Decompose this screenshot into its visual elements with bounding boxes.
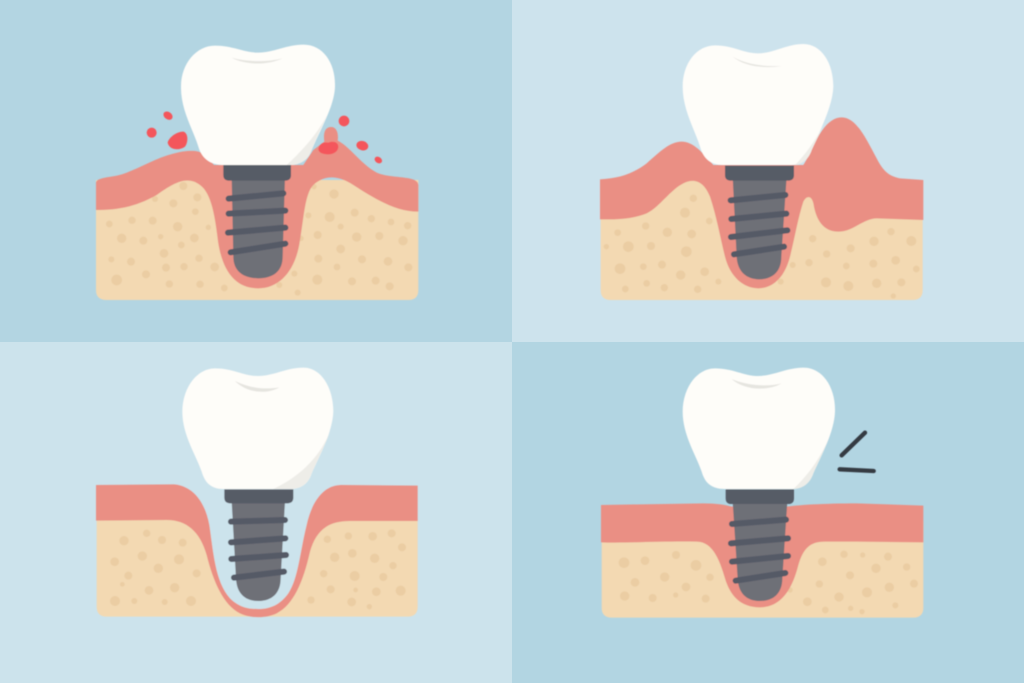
implant post [232,502,285,601]
panel: implant with flat gum and motion marks [601,368,923,618]
crown body [182,368,333,489]
panel: top left background [0,0,512,342]
crown body [683,368,835,489]
crown groove [232,58,282,64]
bone pores [619,551,918,614]
crown groove [733,57,782,67]
bone [97,518,418,617]
upper mark [842,433,865,455]
exposed socket [175,482,340,609]
crown body [683,44,833,165]
crown groove [732,379,782,389]
implant collar [224,489,293,503]
implant collar [726,489,794,504]
implant collar [725,166,794,181]
blood drops [147,110,383,165]
implant [224,489,293,601]
panel: bottom left background [0,342,512,683]
crown shading [273,430,331,489]
crown groove [235,381,279,392]
implant threads [231,520,286,578]
crown body [181,45,335,165]
crown [181,45,335,165]
gum [96,484,418,617]
crown shading [793,433,831,489]
crown [683,368,835,489]
panel: implant with swollen gum [600,44,923,300]
implant post [733,177,787,279]
implant [726,489,794,601]
implant threads [731,195,787,254]
motion marks [840,433,874,471]
bone pores [106,182,412,296]
implant [223,165,291,278]
gum [96,127,418,288]
bone pores [110,529,406,609]
panel: top right background [512,0,1024,342]
gum [600,117,923,288]
crown shading [795,122,825,165]
crown [683,44,833,165]
implant post [232,177,285,278]
bone [601,180,923,300]
panel: implant with bleeding gums [96,45,418,300]
bone pores [604,195,920,299]
implant [725,166,794,279]
panel: implant with receded gum and exposed socket [96,368,418,617]
implant post [733,502,787,601]
bone [96,180,418,300]
gum [601,503,923,607]
lower mark [840,469,874,471]
implant threads [731,520,788,581]
implant threads [228,193,285,252]
crown [182,368,333,489]
implant collar [223,165,291,181]
bone [602,522,923,618]
crown shading [287,104,332,165]
panel: bottom right background [512,342,1024,683]
